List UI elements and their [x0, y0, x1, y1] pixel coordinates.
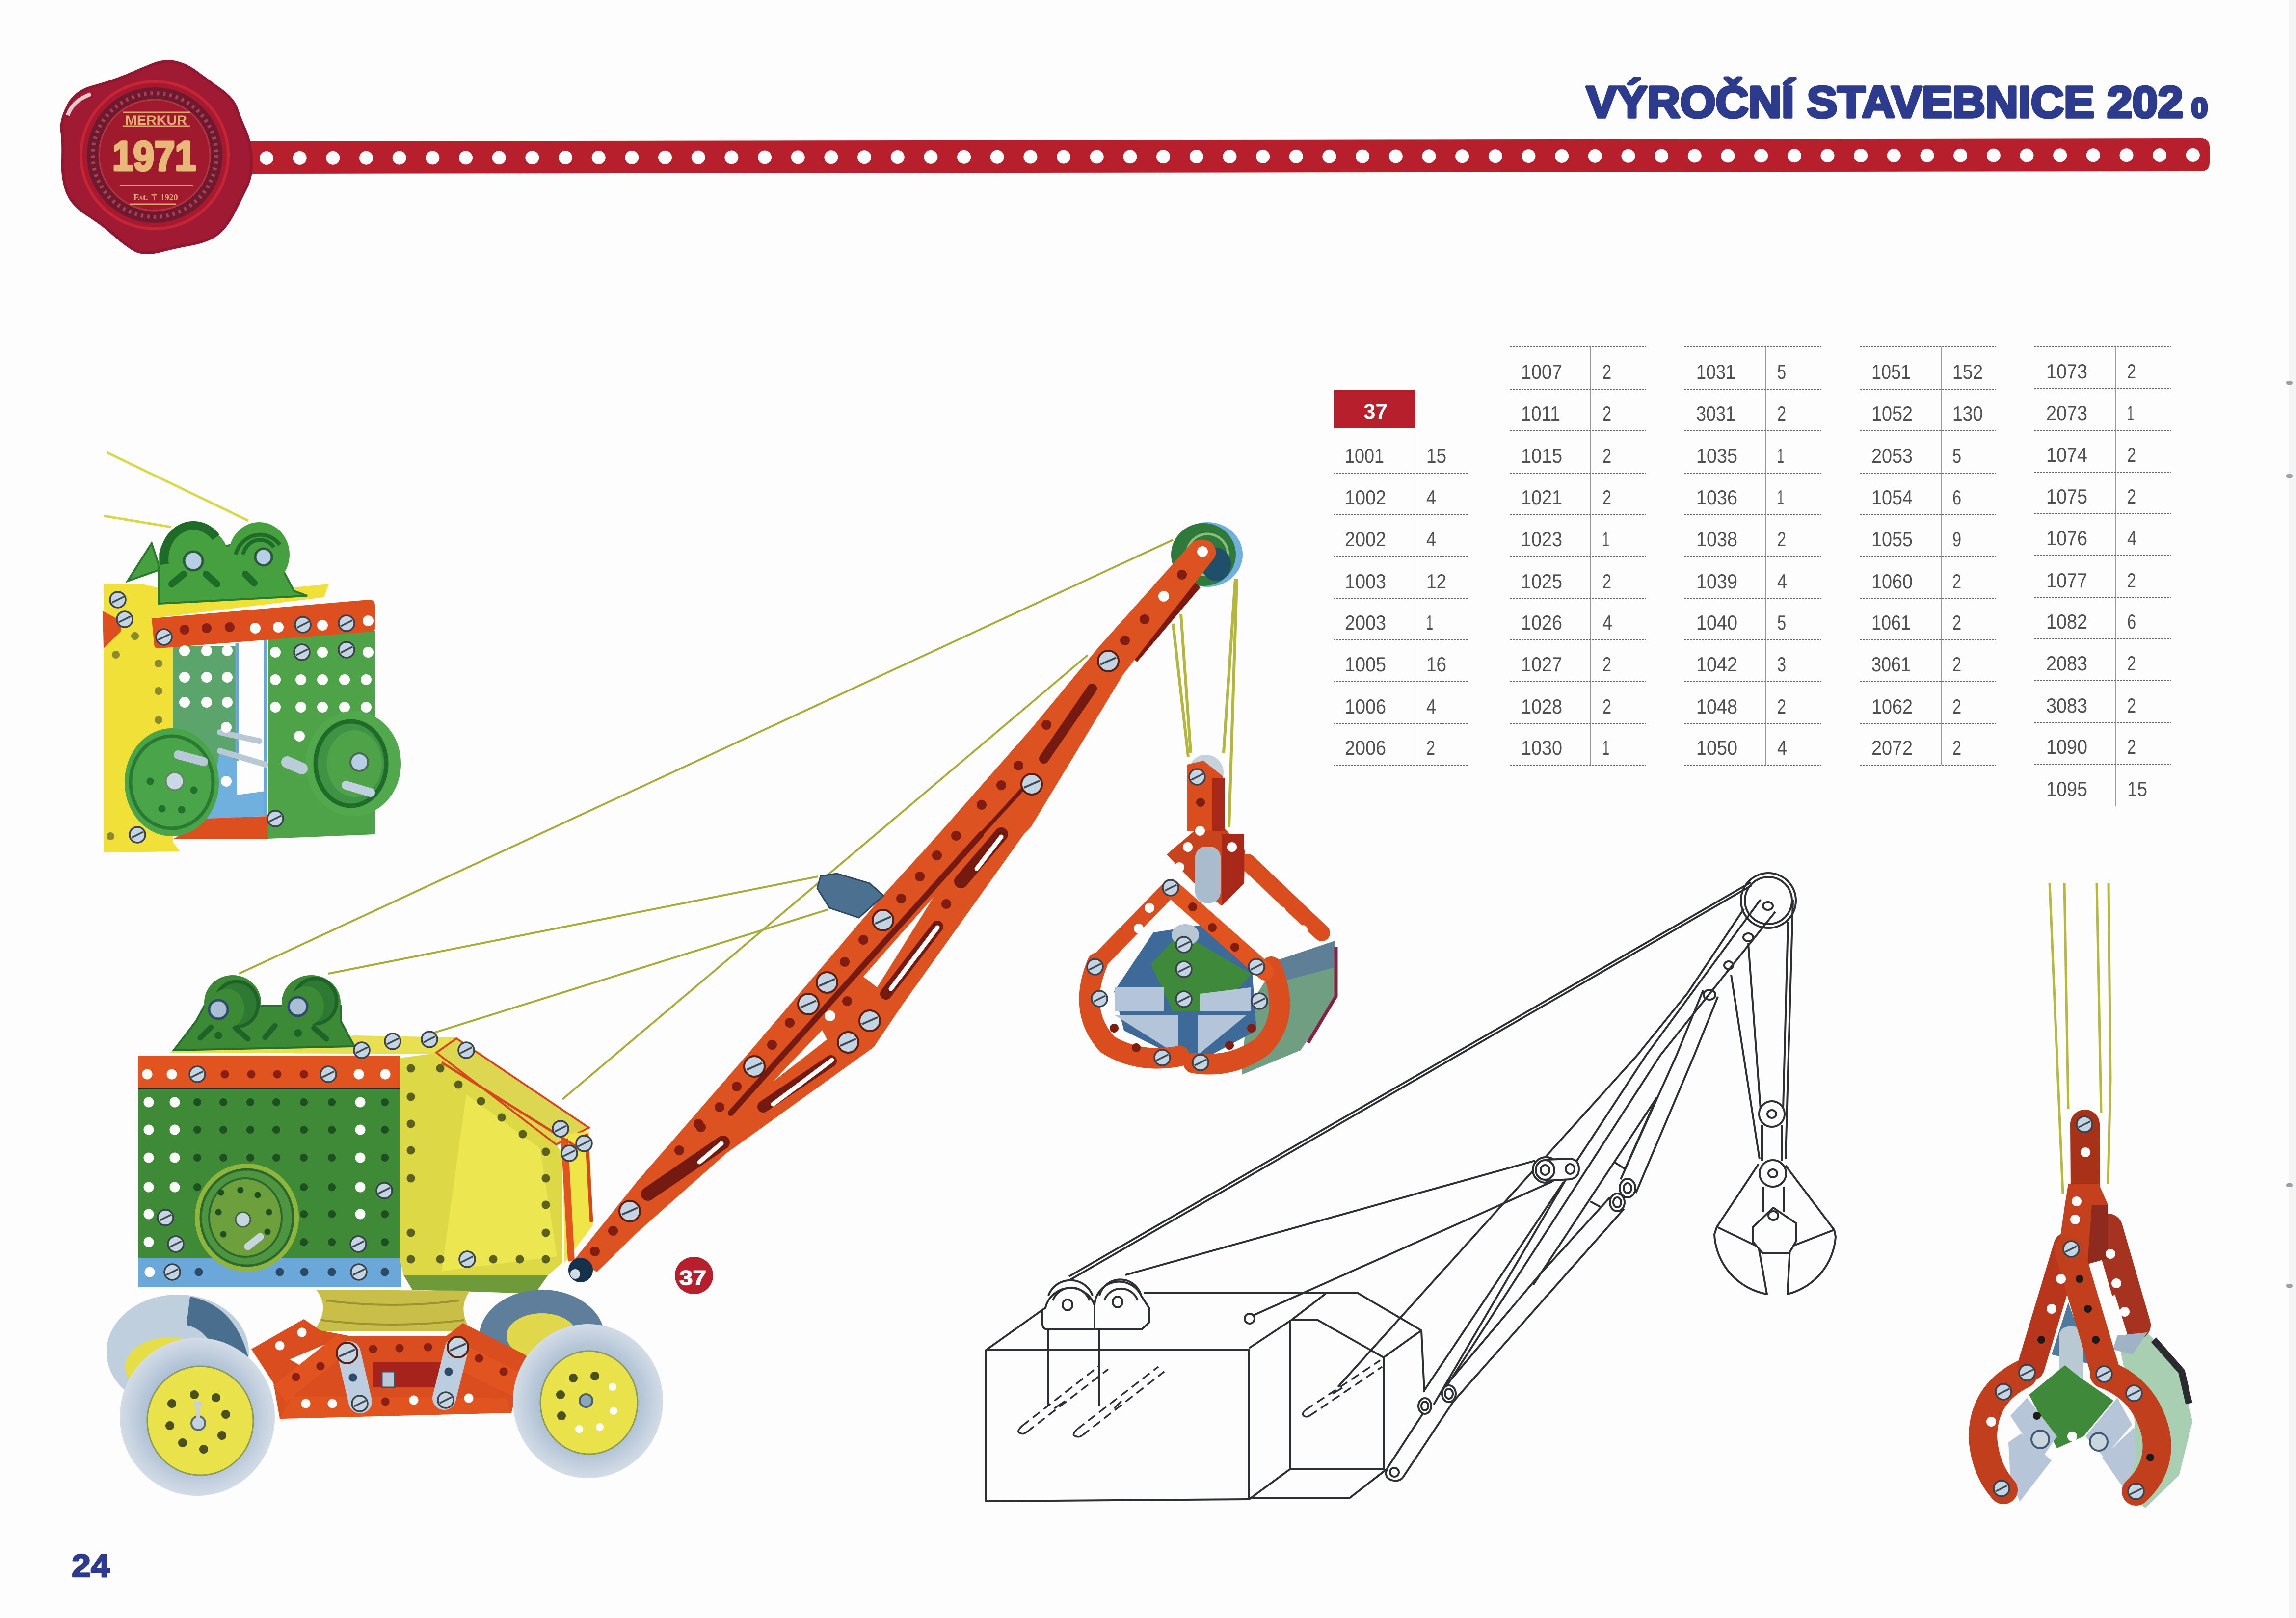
table column 2: 2: [1602, 444, 1611, 467]
main crane: pulley block on roof: [170, 975, 456, 1054]
table column 5: 2083: [2046, 652, 2087, 675]
close-up strings: [2050, 883, 2110, 1194]
table column 5: 2: [2127, 485, 2136, 508]
badge 37: [675, 1257, 713, 1294]
cabin screws: [158, 1032, 592, 1280]
table column 2: 2: [1602, 653, 1611, 676]
close-up screws: [1994, 1116, 2144, 1499]
grab interior: [1114, 923, 1256, 1065]
close-up green scoop: [2117, 1332, 2192, 1508]
table header: set 37: 37: [1363, 400, 1388, 424]
grab holes: [1139, 831, 1303, 930]
table column 5: 3083: [2046, 694, 2087, 717]
main crane: cabin: [138, 1032, 593, 1294]
table column 5: 1095: [2046, 777, 2087, 800]
header strip with holes: [245, 138, 2210, 174]
table column 5: 1: [2127, 401, 2134, 424]
table column 5: 2: [2127, 652, 2136, 675]
badge 37: 37: [679, 1266, 706, 1289]
table column 1: 1001: [1345, 444, 1384, 467]
table column 4: 1060: [1871, 570, 1913, 593]
table column 2: 2: [1602, 360, 1611, 383]
diagram: roof pulleys: [1042, 1279, 1149, 1406]
grab head: [1167, 827, 1245, 905]
cabin green panel: [138, 1088, 400, 1258]
close-up right rear arm: [2108, 1228, 2136, 1325]
table column 4: [1860, 347, 1996, 765]
table column 5: 1090: [2046, 735, 2087, 758]
turntable: [314, 1290, 471, 1331]
table column 3: 1042: [1696, 653, 1737, 676]
cabin holes: [147, 1074, 385, 1272]
wax seal 1971: [62, 61, 251, 253]
table column 2: 2: [1602, 695, 1611, 718]
table column 1: [1334, 428, 1469, 765]
cabin blue strip: [138, 1258, 401, 1287]
table column 4: 1062: [1871, 695, 1913, 718]
table column 1: 1003: [1345, 570, 1386, 593]
diagram: cabin box: [986, 1293, 1424, 1501]
diagram: cables: [1069, 882, 1752, 1387]
table column 1: 4: [1426, 486, 1436, 509]
table column 3: 2: [1777, 695, 1786, 718]
table column 3: 1040: [1696, 611, 1737, 634]
table column 4: 2: [1952, 736, 1961, 759]
table column 3: 4: [1777, 570, 1787, 593]
table column 2: 1028: [1521, 695, 1562, 718]
table column 4: 2: [1952, 653, 1961, 676]
diagram: dashed shafts: [1018, 1360, 1382, 1437]
table column 3: 1031: [1696, 360, 1735, 383]
table column 5: 1076: [2046, 527, 2087, 550]
table column 2: 1025: [1521, 570, 1562, 593]
table column 3: 2: [1777, 528, 1786, 551]
grab arms: [1090, 862, 1322, 1064]
table column 2: 4: [1602, 611, 1612, 634]
boom dark rail and slots: [648, 689, 1092, 1194]
table column 4: 2053: [1871, 444, 1913, 467]
boom pivot: [568, 1258, 593, 1282]
table column 5: 4: [2127, 527, 2137, 550]
table column 1: 1002: [1345, 486, 1386, 509]
diagram: link plate: [1533, 1157, 1579, 1183]
table column 5: 1074: [2046, 443, 2087, 466]
inset yellow side panel: [104, 584, 329, 852]
table column 1: 4: [1426, 528, 1436, 551]
table column 3: [1684, 347, 1821, 765]
inset mechanism behind gap: [207, 751, 266, 819]
table column 2: 2: [1602, 570, 1611, 593]
table column 5: 2: [2127, 694, 2136, 717]
rear left wheel: [107, 1295, 249, 1409]
table column 1: 2003: [1345, 611, 1386, 634]
close-up center: [2008, 1302, 2136, 1502]
table column 3: 2: [1777, 402, 1786, 425]
rear right wheel: [479, 1290, 605, 1386]
table column 5: 2: [2127, 735, 2136, 758]
table column 3: 1: [1777, 486, 1784, 509]
table column 1: 2: [1426, 736, 1435, 759]
table column 4: 130: [1952, 402, 1983, 425]
table column 5: 2: [2127, 443, 2136, 466]
close-up grab bucket: [1983, 883, 2192, 1508]
table column 1: 4: [1426, 695, 1436, 718]
table column 1: 1006: [1345, 695, 1386, 718]
inset: crane cabin rear detail: [103, 452, 401, 852]
table column 4: 1054: [1871, 486, 1913, 509]
table column 2: 1: [1602, 528, 1609, 551]
lower part of tip shadow: [1134, 584, 1197, 659]
table column 5: [2034, 346, 2171, 806]
grab outer green scoop: [1242, 941, 1337, 1075]
crane strings: [239, 540, 1237, 1099]
boom bracket: [817, 874, 883, 918]
table column 2: 1021: [1521, 486, 1562, 509]
table column 2: 1026: [1521, 611, 1562, 634]
boom tip pulley: [1171, 522, 1243, 587]
inset screws: [110, 592, 354, 843]
table column 4: 5: [1952, 444, 1961, 467]
title: 0: [2191, 92, 2208, 123]
chassis frame: [251, 1319, 526, 1419]
table column 4: 152: [1952, 360, 1983, 383]
table column 2: 2: [1602, 486, 1611, 509]
close-up holes: [1991, 1152, 2125, 1436]
table column 4: 2: [1952, 570, 1961, 593]
title: VÝROČNÍ STAVEBNICE 202: [1586, 77, 2183, 127]
inset red bar: [152, 600, 375, 648]
table column 1: 2002: [1345, 528, 1386, 551]
table column 5: 2: [2127, 360, 2136, 383]
table column 3: 1: [1777, 444, 1784, 467]
table column 3: 3: [1777, 653, 1786, 676]
inset green rear panel: [173, 646, 237, 818]
table column 1: 16: [1426, 653, 1446, 676]
diagram: hanging ropes and grab: [1714, 900, 1836, 1294]
cabin red strip: [138, 1056, 400, 1088]
seal text: MERKUR: MERKUR: [125, 113, 187, 128]
line diagram: crane: [986, 873, 1836, 1501]
table column 2: 2: [1602, 402, 1611, 425]
boom white gaps: [773, 897, 934, 1082]
inset green pulley block: [128, 522, 307, 604]
parts table: [1334, 346, 2171, 806]
table column 4: 2: [1952, 695, 1961, 718]
table column 2: 1030: [1521, 736, 1562, 759]
cabin underside: [403, 1275, 548, 1294]
table column 4: 3061: [1871, 653, 1911, 676]
table column 3: 1035: [1696, 444, 1737, 467]
table column 3: 1038: [1696, 528, 1737, 551]
table column 5: 1082: [2046, 610, 2087, 633]
table column 1: 1005: [1345, 653, 1386, 676]
main crane: grab bucket: [1087, 755, 1337, 1075]
table column 2: 1011: [1521, 402, 1560, 425]
grab screws: [1087, 769, 1267, 1070]
table column 2: 1023: [1521, 528, 1562, 551]
cabin pulley: [195, 1164, 299, 1272]
table column 5: 2073: [2046, 401, 2087, 424]
table column 1: 12: [1426, 570, 1446, 593]
inset strings: [104, 452, 248, 527]
table column 3: 1048: [1696, 695, 1737, 718]
table column 5: 6: [2127, 610, 2136, 633]
chassis silver links: [337, 1337, 468, 1411]
table column 3: 5: [1777, 360, 1786, 383]
table column 3: 1039: [1696, 570, 1737, 593]
front left wheel: [120, 1338, 275, 1496]
main crane: boom: [568, 522, 1243, 1282]
table column 1: 1: [1426, 611, 1433, 634]
page number: 24: [72, 1547, 110, 1584]
table column 5: 2: [2127, 569, 2136, 592]
seal text: established: Est. ⚚ 1920: [133, 192, 178, 202]
table column 4: 1055: [1871, 528, 1913, 551]
table column 2: [1510, 347, 1646, 765]
table column 5: 1075: [2046, 485, 2087, 508]
front right wheel: [513, 1324, 663, 1478]
boom orange body: [575, 540, 1216, 1272]
diagram: boom pins: [1418, 1179, 1635, 1414]
inset holes: [185, 621, 368, 781]
table column 1: 15: [1426, 444, 1446, 467]
table column 4: 9: [1952, 528, 1961, 551]
table column 5: 1073: [2046, 360, 2087, 383]
seal text: year: 1971: [112, 133, 196, 179]
inset left pulley: [125, 728, 219, 836]
table column 3: 5: [1777, 611, 1786, 634]
table column 5: 15: [2127, 777, 2147, 800]
table column 5: 1077: [2046, 569, 2087, 592]
table column 4: 2: [1952, 611, 1961, 634]
table column 3: 1036: [1696, 486, 1737, 509]
close-up claws and arms: [1983, 1124, 2157, 1491]
table column 3: 3031: [1696, 402, 1735, 425]
diagram: boom: [1386, 873, 1796, 1481]
table header: set 37: [1334, 390, 1415, 428]
table column 2: 1027: [1521, 653, 1562, 676]
table column 4: 1061: [1871, 611, 1911, 634]
table column 2: 1015: [1521, 444, 1562, 467]
inset green right panel: [268, 631, 375, 839]
main crane: undercarriage: [107, 1290, 663, 1496]
inset right pulley: [287, 711, 401, 816]
cabin yellow side: [400, 1053, 562, 1275]
table column 4: 2072: [1871, 736, 1913, 759]
table column 2: 1: [1602, 736, 1609, 759]
table column 1: 2006: [1345, 736, 1386, 759]
boom holes: [595, 575, 1182, 1251]
table column 3: 4: [1777, 736, 1787, 759]
table column 4: 6: [1952, 486, 1961, 509]
table column 2: 1007: [1521, 360, 1562, 383]
boom screws: [619, 651, 1119, 1221]
table column 4: 1052: [1871, 402, 1913, 425]
table column 3: 1050: [1696, 736, 1737, 759]
table column 4: 1051: [1871, 360, 1911, 383]
